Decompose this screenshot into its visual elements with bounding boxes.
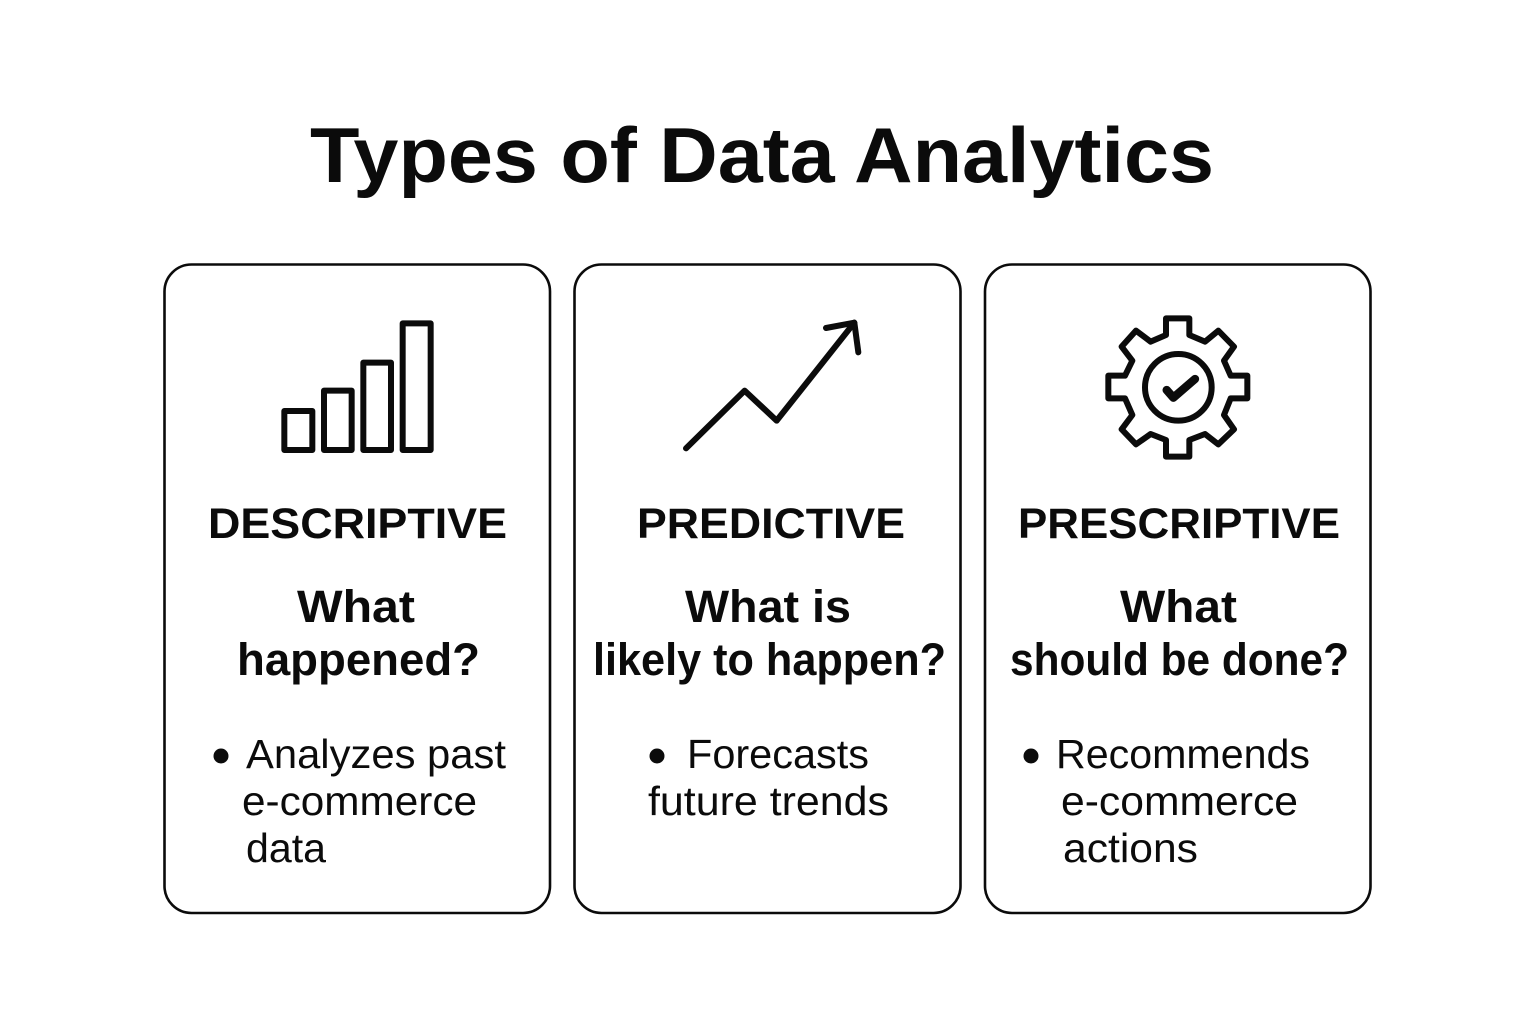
bullet list: predictive bbox=[648, 731, 889, 824]
bullet list: predictive: future trends bbox=[648, 778, 889, 824]
panel: descriptive bbox=[164, 264, 550, 913]
question: what should be done bbox=[1010, 581, 1349, 685]
panel: predictive bbox=[574, 264, 960, 913]
bullet list: descriptive: Analyzes past bbox=[246, 731, 507, 777]
question: what should be done: What bbox=[1120, 581, 1237, 632]
icon: trend arrow bbox=[686, 323, 858, 448]
bullet list: descriptive bbox=[214, 731, 507, 871]
question: what is likely to happen bbox=[593, 581, 946, 685]
question: what should be done: should be done? bbox=[1010, 634, 1349, 685]
heading: predictive: PREDICTIVE bbox=[637, 500, 905, 548]
panel: prescriptive bbox=[985, 264, 1370, 913]
bullet list: prescriptive: e-commerce bbox=[1061, 778, 1298, 824]
heading: prescriptive: PRESCRIPTIVE bbox=[1018, 500, 1340, 548]
bullet list: descriptive: e-commerce bbox=[242, 778, 477, 824]
bullet list: prescriptive: actions bbox=[1063, 825, 1198, 871]
question: what happened bbox=[237, 581, 480, 685]
heading: descriptive: DESCRIPTIVE bbox=[208, 500, 507, 548]
bullet list: predictive: Forecasts bbox=[687, 731, 869, 777]
bullet list: prescriptive: Recommends bbox=[1056, 731, 1310, 777]
bullet list: descriptive: data bbox=[246, 825, 326, 871]
icon: gear with check bbox=[1108, 318, 1247, 457]
question: what happened: What bbox=[297, 581, 415, 632]
title: Types of Data Analytics bbox=[310, 111, 1214, 199]
question: what is likely to happen: What is bbox=[685, 581, 851, 632]
question: what happened: happened? bbox=[237, 634, 480, 685]
question: what is likely to happen: likely to happen? bbox=[593, 634, 946, 685]
bullet list: prescriptive bbox=[1024, 731, 1310, 871]
icon: bar chart bbox=[284, 323, 431, 450]
